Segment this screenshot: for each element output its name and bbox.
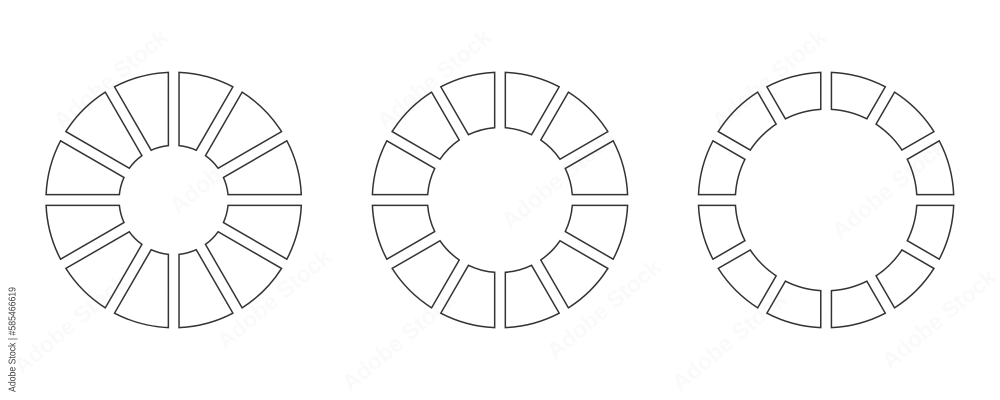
segment 1 [831,72,885,119]
segment 10 [372,141,435,195]
segment 11 [66,85,160,171]
segment 9 [34,174,128,259]
chart: wheel with small inner hole [34,60,314,340]
segment 6 [815,273,885,340]
segment 2 [871,92,941,159]
segment 5 [187,229,282,315]
segment 2 [537,92,615,173]
segment 8 [59,213,144,308]
background watermark: Adobe Stock [667,285,791,396]
segment 10 [46,141,124,195]
chart: ring with medium inner hole [360,60,640,340]
segment 1 [179,72,233,150]
segment 11 [718,85,785,155]
segment 5 [527,237,608,315]
segment 7 [115,250,168,328]
segment 1 [505,72,559,135]
segment 4 [907,205,954,259]
segment 4 [223,205,301,259]
segment 6 [147,246,233,340]
segment 10 [698,141,745,195]
background watermark: Adobe Stock [49,23,173,134]
segment 4 [565,205,628,259]
segment 5 [867,245,934,315]
background watermark: Adobe Stock [212,243,336,354]
segment 11 [392,85,473,163]
segment 6 [481,259,559,340]
segment 12 [115,60,200,154]
segment 7 [767,281,821,328]
segment 12 [767,60,837,127]
background watermark: Adobe Stock [9,268,133,379]
segment 9 [360,181,441,259]
segment 3 [899,141,966,211]
background watermark: Adobe Stock [877,263,1000,374]
segment 3 [559,141,640,219]
segment 7 [441,265,495,328]
segment 3 [219,141,314,226]
background watermark: Adobe [165,153,236,219]
background watermark: Adobe Stock [827,133,951,244]
segment 9 [686,189,753,259]
background watermark: Adobe Stock [707,23,831,134]
background watermark: Adobe Stock [337,285,461,396]
background watermark: Adobe Stock [542,253,666,364]
segment 8 [385,227,463,308]
segment 2 [203,92,289,187]
background watermark: Adobe Stock [497,123,621,234]
background watermark: Adobe Stock [372,23,496,134]
chart: thin ring with large inner hole [686,60,966,340]
segment 12 [441,60,519,141]
vertical stock credit text: Adobe Stock | #585466619 [8,287,18,392]
segment 8 [711,241,781,308]
